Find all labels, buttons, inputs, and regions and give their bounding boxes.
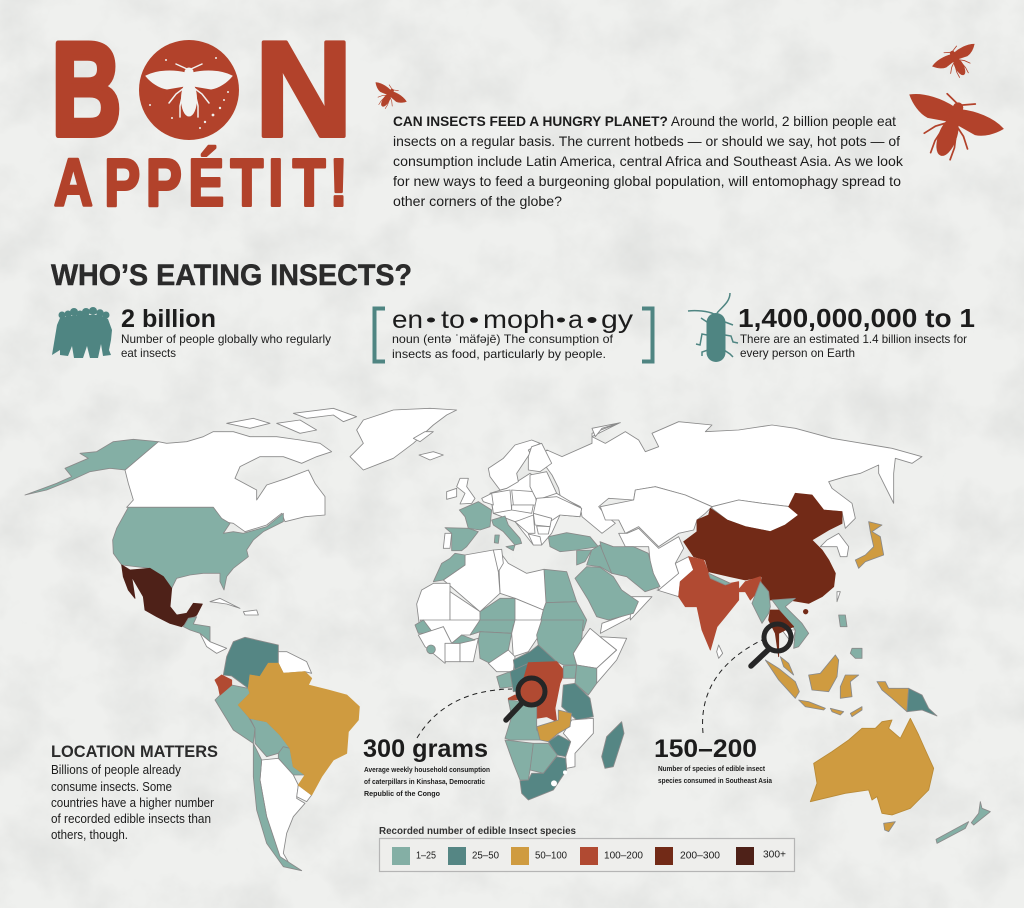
map: Americas (25, 408, 457, 871)
intro paragraph: for new ways to feed a burgeoning global population, will entomophagy spread to (393, 174, 901, 189)
icon: small wasp left (367, 78, 409, 116)
icon: magnifier on Southeast Asia (751, 624, 791, 666)
text block: location matters: others, though. (51, 828, 128, 842)
world map (25, 408, 990, 871)
callout: 300 grams (363, 735, 490, 798)
callout: 300 grams: Average weekly household consumption (364, 765, 490, 774)
definition: entomophagy with brackets: to (441, 306, 465, 334)
heading: who's eating insects: WHO’S EATING INSECTS? (51, 259, 412, 292)
callout: 150-200: Number of species of edible insect (658, 764, 765, 773)
specks on the O (149, 57, 229, 129)
stat: 2 billion: Number of people globally who regularly (121, 332, 331, 346)
icon: magnifier on Congo (506, 678, 545, 720)
stat: 1.4 billion to 1 (738, 303, 975, 360)
title: Bon Appétit: N (255, 13, 353, 165)
map: Russia and Asia (539, 422, 990, 843)
stat: 1.4 billion to 1: every person on Earth (740, 346, 855, 360)
dashed leader: Kinshasa callout (417, 689, 512, 738)
title: Bon Appétit: APPÉTIT! (54, 145, 348, 220)
title: Bon Appétit (51, 13, 353, 220)
intro paragraph: other corners of the globe? (393, 194, 562, 209)
legend: 50–100 (535, 850, 567, 862)
legend: 1–25 (416, 850, 436, 862)
callout: 150-200 (654, 735, 773, 785)
intro paragraph: consumption include Latin America, central Africa and Southeast Asia. As we look (393, 154, 903, 169)
text block: location matters (51, 743, 218, 842)
definition: entomophagy with brackets: a (568, 306, 583, 334)
icon: large wasp right (894, 82, 1008, 173)
definition: entomophagy with brackets: gy (601, 306, 634, 334)
intro paragraph: insects on a regular basis. The current hotbeds — or should we say, hot pots — of (393, 134, 900, 149)
legend: 300+ (763, 850, 786, 860)
title: Bon Appétit: B (51, 15, 122, 164)
icon: small wasp top right (929, 38, 985, 86)
stat: 1.4 billion to 1: There are an estimated 1.4 billion insects for (740, 332, 967, 346)
title: Bon Appétit: O (162, 61, 204, 121)
icon: crowd of people (52, 307, 112, 358)
text block: location matters: Billions of people already (51, 763, 182, 777)
legend (379, 825, 794, 872)
icon: wasp in the O of Bon (146, 64, 232, 117)
stat: 2 billion: 2 billion (121, 305, 216, 333)
definition: entomophagy with brackets: noun (entə ˈmäfəjē) The consumption of (392, 332, 614, 346)
legend: Recorded number of edible Insect species (379, 825, 576, 837)
intro paragraph: CAN INSECTS FEED A HUNGRY PLANET? Around the world, 2 billion people eat (393, 114, 896, 129)
callout: 300 grams: 300 grams (363, 735, 488, 763)
callout: 300 grams: of caterpillars in Kinshasa, Democratic (364, 777, 485, 786)
definition: entomophagy with brackets (374, 306, 652, 362)
intro paragraph (393, 114, 903, 209)
callout: 150-200: 150–200 (654, 735, 757, 763)
stat: 1.4 billion to 1: 1,400,000,000 to 1 (738, 303, 975, 333)
icon: beetle (688, 293, 738, 362)
text block: location matters: countries have a higher number (51, 796, 214, 810)
legend: 200–300 (680, 850, 720, 862)
dashed leader: Southeast Asia callout (703, 640, 762, 733)
map: Europe and Middle East (413, 432, 660, 631)
definition: entomophagy with brackets: en (392, 306, 423, 334)
definition: entomophagy with brackets: insects as food, particularly by people. (392, 347, 606, 361)
legend: 25–50 (472, 850, 499, 862)
definition: entomophagy with brackets: moph (483, 306, 555, 334)
legend: 100–200 (604, 850, 643, 862)
stat: 2 billion (121, 305, 331, 360)
text block: location matters: of recorded edible insects than (51, 812, 211, 826)
callout: 150-200: species consumed in Southeast Asia (658, 776, 773, 785)
map: Africa (415, 620, 627, 800)
stat: 2 billion: eat insects (121, 346, 176, 360)
callout: 300 grams: Republic of the Congo (364, 789, 440, 798)
text block: location matters: LOCATION MATTERS (51, 743, 218, 761)
text block: location matters: consume insects. Some (51, 780, 172, 794)
